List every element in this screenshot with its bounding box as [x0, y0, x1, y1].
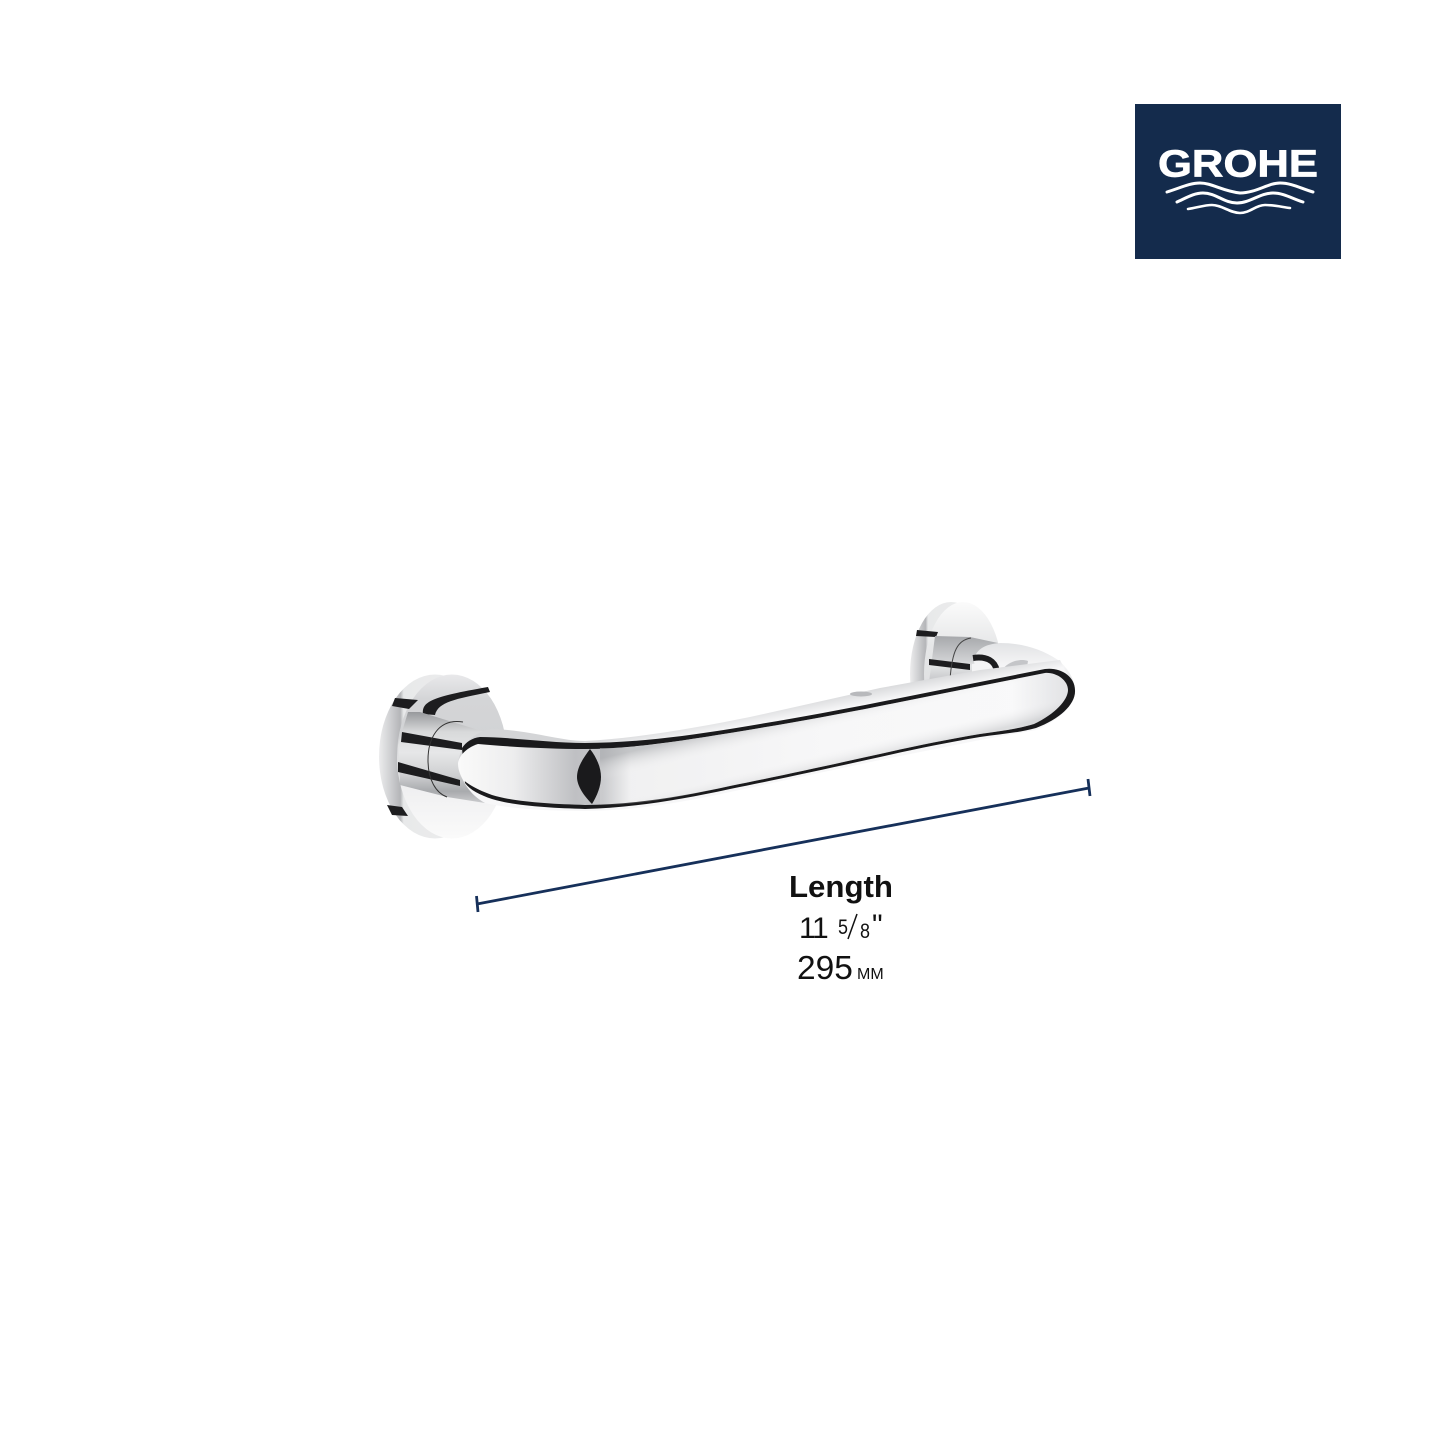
dimension line: [476, 779, 1090, 912]
bar center reflection: [577, 749, 601, 804]
millimetre value: [797, 950, 884, 987]
right tick: [1088, 779, 1090, 796]
product: grab bar: [379, 602, 1075, 838]
right wall flange: [910, 602, 998, 682]
dimension label: [789, 869, 893, 987]
inch value: ": [872, 909, 883, 942]
millimetre value: 295: [797, 950, 853, 987]
logo wordmark: GROHE: [1158, 144, 1318, 186]
inch value: [799, 909, 883, 945]
bar set-screw hole: [850, 692, 872, 696]
inch value: 11: [799, 912, 829, 945]
right bend of bar: [974, 643, 1075, 690]
bar polished face: [458, 673, 1068, 805]
bar dark reflection line: [462, 669, 1075, 809]
label heading: Length: [789, 869, 893, 904]
inch value: 5: [838, 916, 848, 939]
GROHE logo: [1135, 104, 1341, 259]
millimetre value: MM: [857, 966, 884, 983]
left tick: [476, 896, 478, 912]
left wall flange: [379, 674, 507, 838]
inch value: 8: [860, 920, 870, 943]
logo waves: [1167, 183, 1313, 213]
bar body: [458, 660, 1075, 811]
